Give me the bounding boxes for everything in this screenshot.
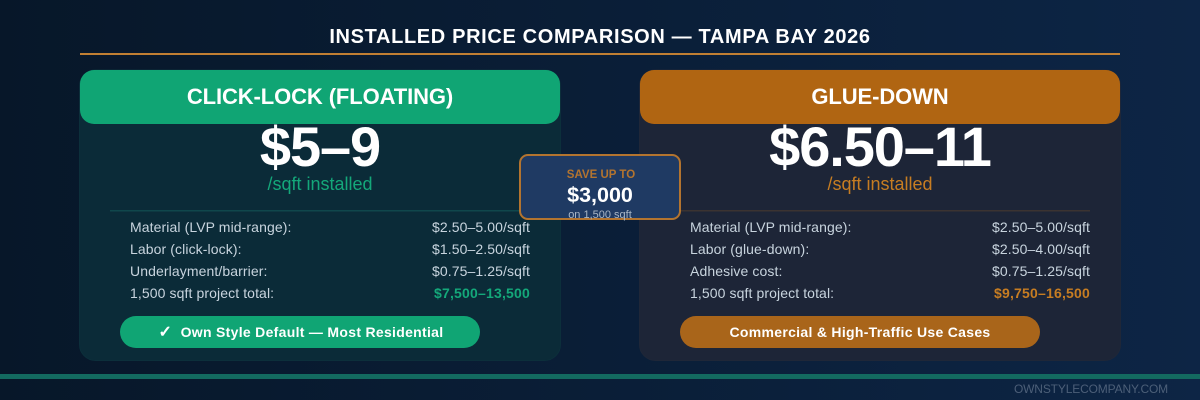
cost table: click-lock: 1,500 sqft project total: [130, 285, 274, 301]
cost table: glue-down: Labor (glue-down): [690, 241, 809, 257]
price: glue-down: $6.50–11 [769, 115, 991, 178]
header: click-lock: CLICK-LOCK (FLOATING) [187, 84, 453, 109]
cost table: click-lock: Labor (click-lock): [130, 241, 242, 257]
badge: own style default [120, 316, 480, 348]
cost table: glue-down: 1,500 sqft project total: [690, 285, 834, 301]
title: INSTALLED PRICE COMPARISON — TAMPA BAY 2026 [329, 26, 871, 48]
panel: glue-down [640, 70, 1120, 360]
header: glue-down: GLUE-DOWN [811, 84, 949, 109]
badge: commercial use cases [680, 316, 1040, 348]
cost table: glue-down: Adhesive cost: [690, 263, 782, 279]
callout: savings [520, 155, 680, 221]
price: click-lock: /sqft installed [267, 174, 373, 194]
panel background: click-lock [80, 70, 560, 360]
badge: commercial use cases: Commercial & High-Traffic Use Cases [729, 324, 991, 340]
footer band [0, 374, 1200, 379]
cost table: click-lock: $1.50–2.50/sqft [432, 241, 530, 257]
cost table: click-lock: $0.75–1.25/sqft [432, 263, 530, 279]
cost table: glue-down [690, 219, 1090, 301]
cost table: glue-down: $0.75–1.25/sqft [992, 263, 1090, 279]
panel: click-lock [80, 70, 560, 360]
price: click-lock: $5–9 [260, 115, 380, 178]
panel background: glue-down [640, 70, 1120, 360]
footer: website: OWNSTYLECOMPANY.COM [1014, 382, 1168, 396]
badge: own style default: ✓ Own Style Default — Most Residential [159, 322, 443, 341]
callout: savings: on 1,500 sqft [568, 209, 632, 221]
callout: savings: SAVE UP TO [567, 169, 635, 181]
cost table: glue-down: Material (LVP mid-range): [690, 219, 851, 235]
cost table: glue-down: $2.50–4.00/sqft [992, 241, 1090, 257]
header: glue-down [640, 70, 1120, 124]
cost table: click-lock: $7,500–13,500 [434, 285, 530, 301]
cost table: click-lock: Underlayment/barrier: [130, 263, 268, 279]
cost table: click-lock: Material (LVP mid-range): [130, 219, 291, 235]
cost table: click-lock [130, 219, 530, 301]
cost table: glue-down: $9,750–16,500 [994, 285, 1090, 301]
cost table: glue-down: $2.50–5.00/sqft [992, 219, 1090, 235]
callout: savings: $3,000 [567, 183, 633, 207]
header: click-lock [80, 70, 560, 124]
price: glue-down: /sqft installed [827, 174, 933, 194]
cost table: click-lock: $2.50–5.00/sqft [432, 219, 530, 235]
